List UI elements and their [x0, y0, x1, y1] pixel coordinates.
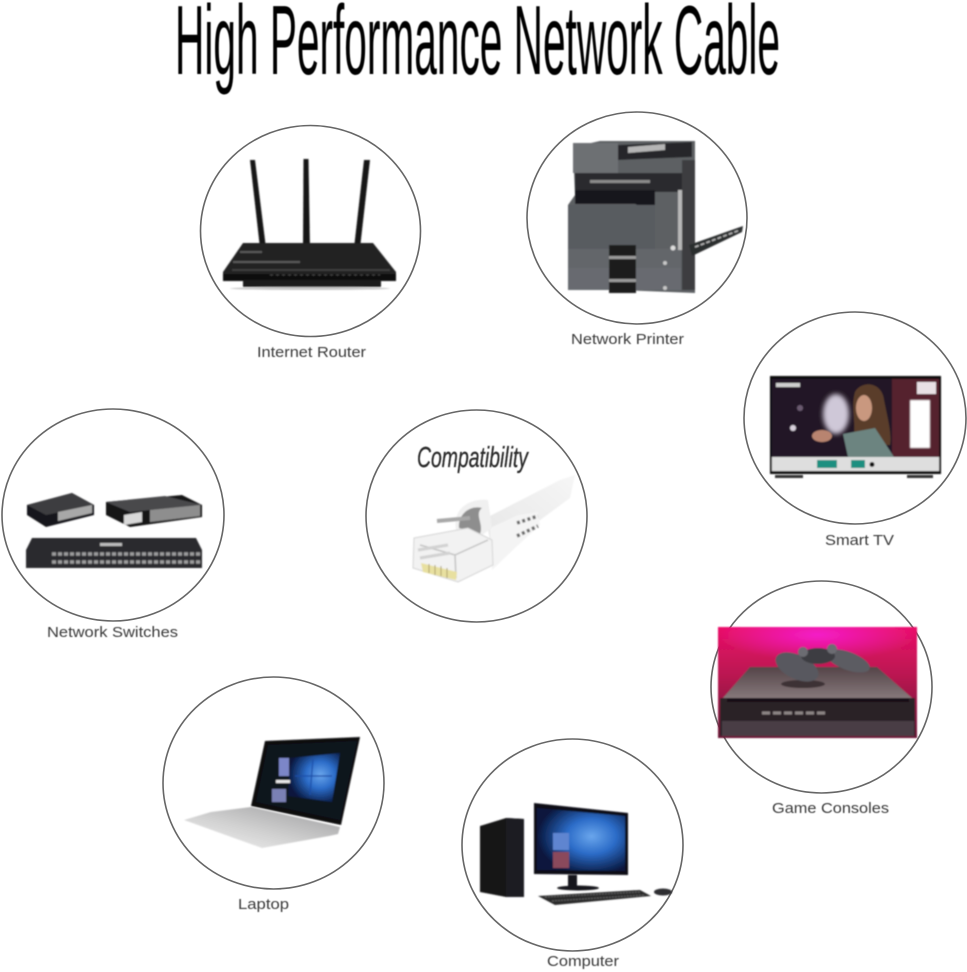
icon: router	[223, 159, 396, 290]
panel: computer	[462, 739, 683, 951]
icon: game console	[718, 627, 917, 738]
label: network printer: Network Printer	[571, 332, 684, 348]
label: network switches: Network Switches	[47, 625, 178, 641]
label: laptop: Laptop	[238, 897, 289, 913]
controller	[771, 644, 873, 688]
panel: internet router	[200, 126, 420, 336]
icon: laptop	[184, 737, 360, 848]
panel: smart tv	[744, 312, 966, 524]
icon: smart tv	[770, 376, 941, 478]
panel: network printer	[527, 112, 747, 324]
label: computer: Computer	[547, 954, 619, 970]
heading: compatibility: Compatibility	[417, 442, 529, 474]
icon: desktop computer	[480, 803, 672, 905]
icon: printer	[568, 141, 743, 293]
label: game consoles: Game Consoles	[772, 801, 889, 817]
icon: ethernet plug	[413, 475, 575, 582]
label: internet router: Internet Router	[257, 345, 366, 361]
panel: compatibility	[366, 410, 587, 622]
panel: laptop	[163, 677, 384, 889]
label: smart tv: Smart TV	[825, 533, 894, 549]
panel: game consoles	[711, 581, 932, 793]
icon: network switches	[26, 493, 202, 568]
panel: network switches	[2, 409, 224, 621]
